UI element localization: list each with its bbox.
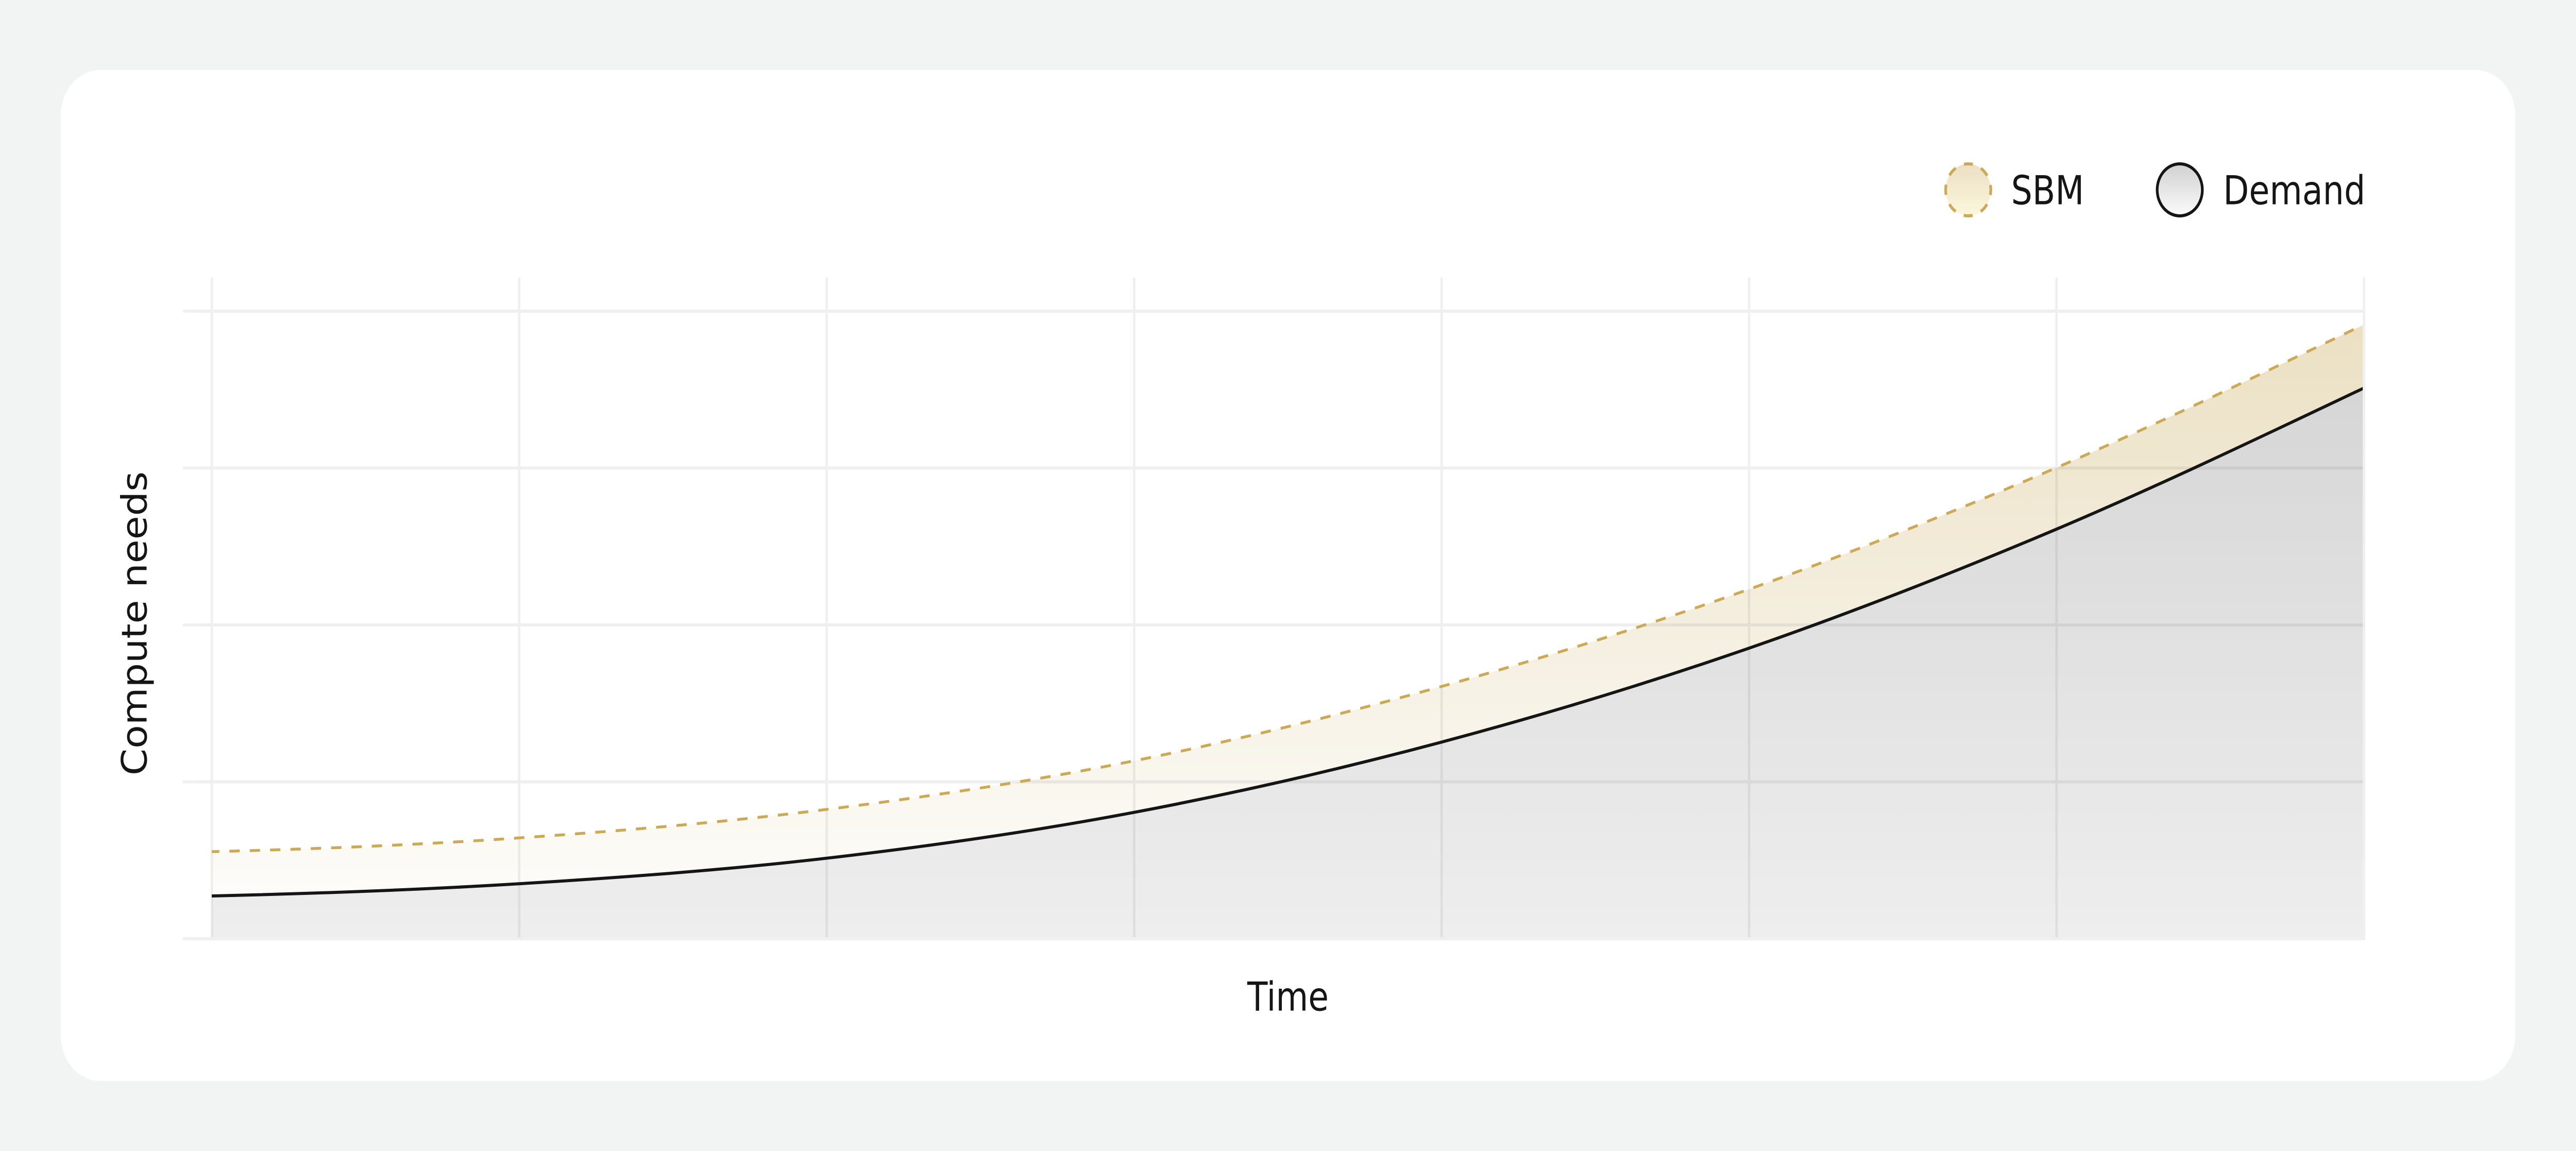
legend label: SBM: SBM [2011, 167, 2084, 214]
icon: Demand swatch [2157, 164, 2202, 216]
x-axis title: Time [1247, 974, 1329, 1021]
y-axis title: Compute needs [115, 471, 155, 775]
icon: SBM swatch [1945, 164, 1991, 216]
line: Demand curve [212, 388, 2364, 896]
area: SBM band [212, 325, 2364, 896]
legend item: Demand [2157, 164, 2365, 216]
chart grid [184, 279, 2364, 939]
legend [1945, 164, 2365, 216]
legend item: SBM [1945, 164, 2084, 216]
area: Demand [212, 388, 2364, 943]
line: SBM dashed curve [212, 325, 2364, 852]
legend label: Demand: Demand [2223, 167, 2365, 214]
area chart: SBM and Demand [184, 279, 2364, 943]
